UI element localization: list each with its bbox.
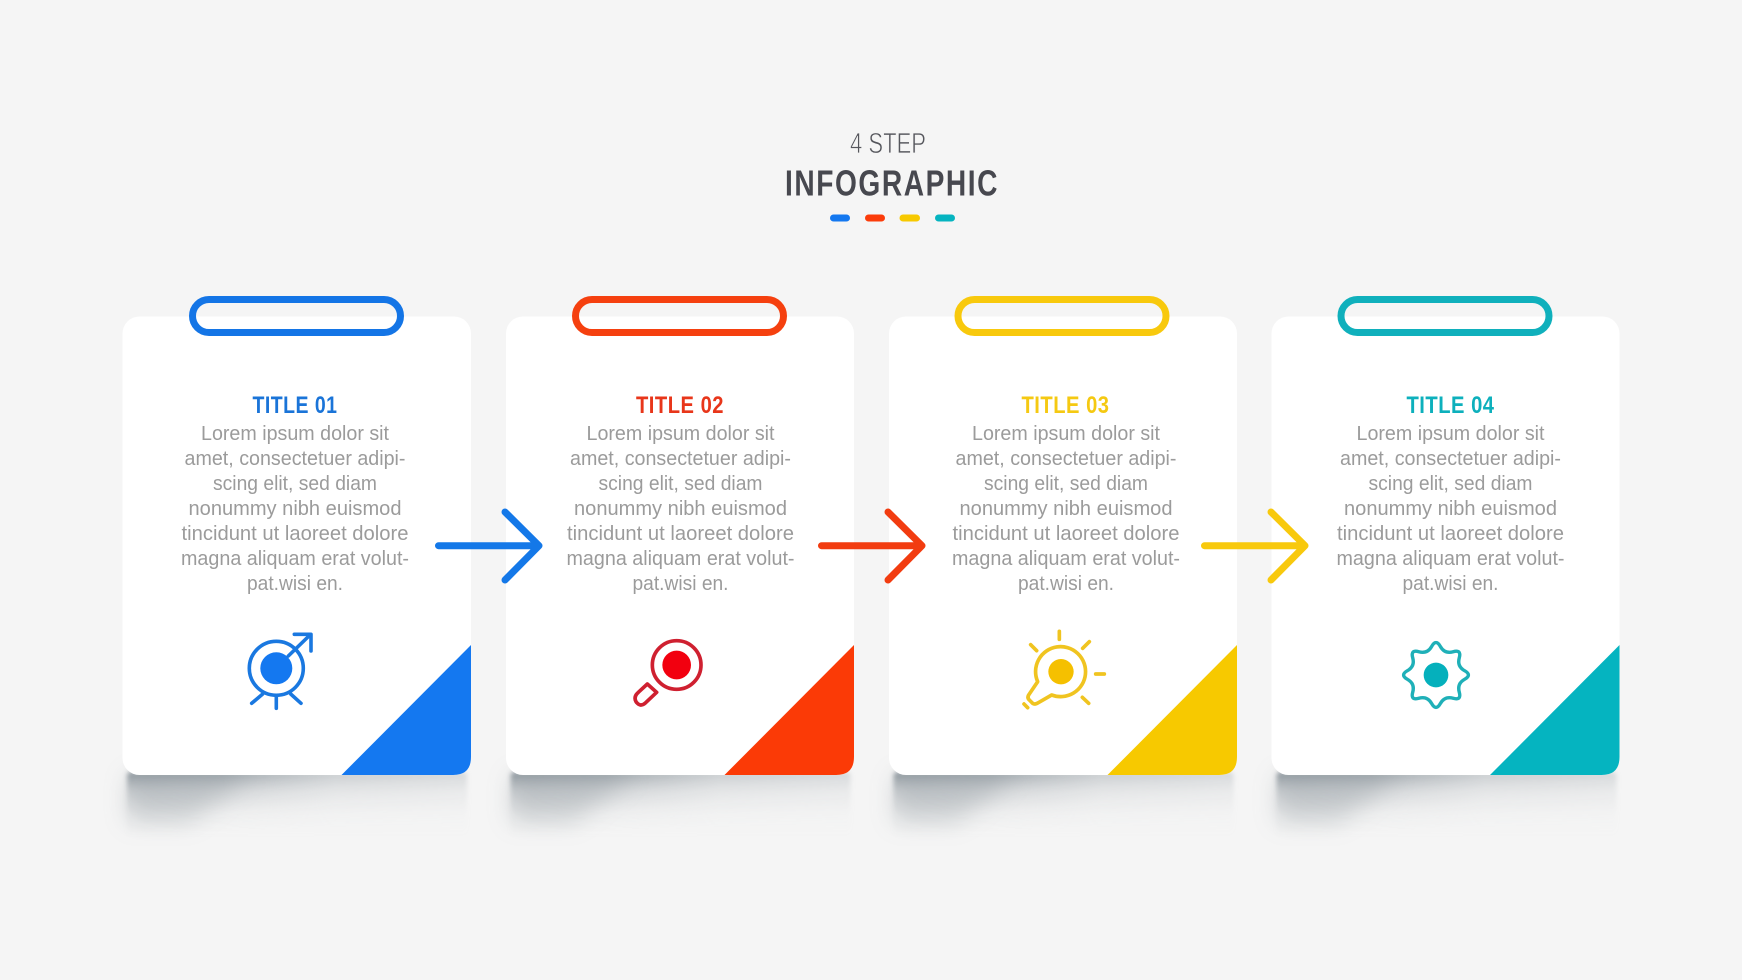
arrow 3 — [1204, 512, 1305, 580]
body text: nonummy nibh euismod — [574, 497, 787, 520]
body text: magna aliquam erat volut- — [1336, 547, 1564, 570]
clip pill — [1341, 300, 1549, 332]
panel: step 1 — [122, 300, 471, 836]
body text: nonummy nibh euismod — [188, 497, 402, 520]
icon: gear — [1404, 643, 1468, 707]
body text — [952, 422, 1180, 595]
body text: scing elit, sed diam — [598, 472, 762, 495]
card — [1272, 316, 1620, 775]
body text: amet, consectetuer adipi- — [1340, 447, 1561, 470]
body text: tincidunt ut laoreet dolore — [567, 522, 794, 545]
body text: magna aliquam erat volut- — [181, 547, 409, 570]
body text: Lorem ipsum dolor sit — [586, 422, 775, 445]
corner triangle — [724, 645, 854, 775]
panel: step 3 — [889, 300, 1237, 836]
body text: tincidunt ut laoreet dolore — [1337, 522, 1564, 545]
clip pill — [958, 300, 1166, 332]
body text: scing elit, sed diam — [984, 472, 1148, 495]
card — [889, 316, 1237, 775]
card — [122, 316, 471, 775]
body text: amet, consectetuer adipi- — [956, 447, 1176, 470]
body text — [1336, 422, 1564, 595]
corner triangle — [1108, 645, 1237, 775]
heading: TITLE 02 — [636, 392, 724, 419]
clip pill — [576, 300, 784, 332]
header — [785, 128, 999, 222]
body text: magna aliquam erat volut- — [952, 547, 1180, 570]
card shadow — [894, 772, 1234, 836]
icon: light bulb — [1024, 631, 1104, 708]
body text: magna aliquam erat volut- — [566, 547, 794, 570]
card shadow — [1276, 772, 1616, 836]
body text: amet, consectetuer adipi- — [570, 447, 791, 470]
body text: pat.wisi en. — [632, 572, 728, 595]
body text: nonummy nibh euismod — [1344, 497, 1557, 520]
title: 4 step: 4 STEP — [850, 128, 926, 160]
clip pill — [192, 300, 400, 332]
colour dashes — [830, 214, 955, 222]
body text: pat.wisi en. — [247, 572, 343, 595]
card shadow — [127, 772, 467, 836]
body text: tincidunt ut laoreet dolore — [182, 522, 408, 545]
card shadow — [510, 772, 850, 836]
panel: step 4 — [1272, 300, 1620, 836]
arrow 1 — [438, 512, 539, 580]
corner triangle — [342, 645, 471, 775]
panel: step 2 — [506, 300, 854, 836]
title: infographic: INFOGRAPHIC — [785, 162, 999, 204]
card — [506, 316, 854, 775]
heading: TITLE 01 — [252, 392, 338, 419]
corner triangle — [1490, 645, 1620, 775]
body text: pat.wisi en. — [1402, 572, 1498, 595]
body text: tincidunt ut laoreet dolore — [952, 522, 1180, 545]
body text: scing elit, sed diam — [213, 472, 377, 495]
body text: pat.wisi en. — [1018, 572, 1114, 595]
heading: TITLE 04 — [1406, 392, 1495, 419]
body text: nonummy nibh euismod — [960, 497, 1172, 520]
icon: magnifier — [635, 641, 701, 705]
body text: Lorem ipsum dolor sit — [1356, 422, 1545, 445]
body text: Lorem ipsum dolor sit — [201, 422, 389, 445]
body text — [566, 422, 794, 595]
body text: scing elit, sed diam — [1368, 472, 1532, 495]
body text: Lorem ipsum dolor sit — [972, 422, 1160, 445]
body text — [181, 422, 409, 595]
icon: target with arrow — [249, 634, 311, 708]
heading: TITLE 03 — [1022, 392, 1110, 419]
arrow 2 — [822, 512, 922, 580]
body text: amet, consectetuer adipi- — [184, 447, 406, 470]
